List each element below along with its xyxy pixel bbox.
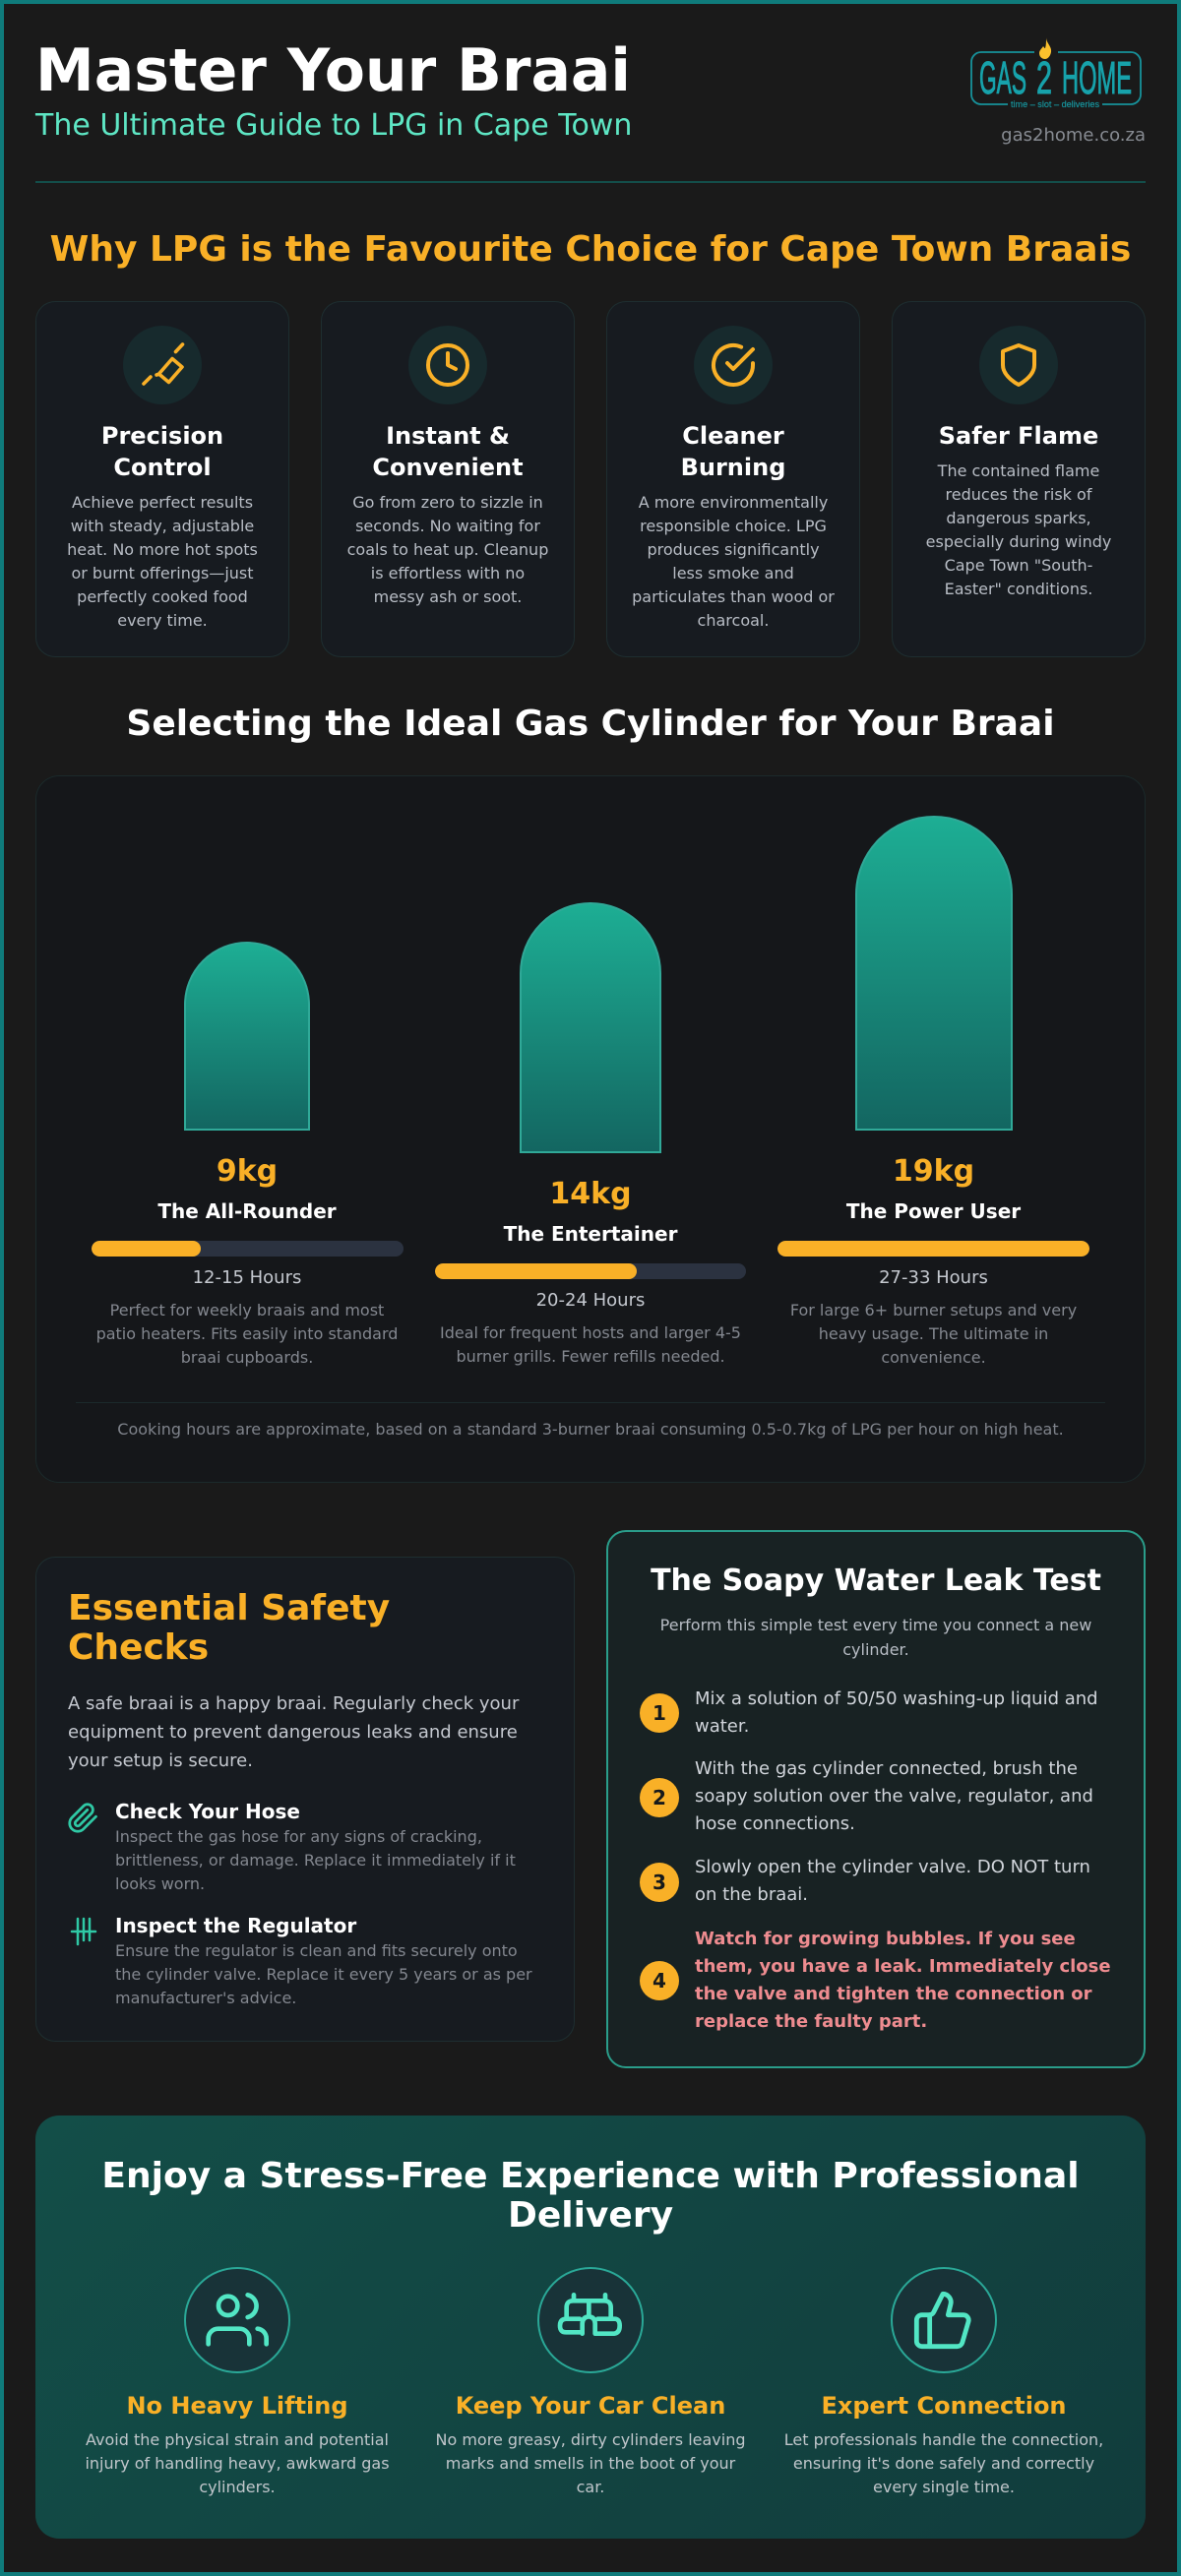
card text: messy ash or soot. bbox=[374, 587, 522, 606]
cylinder: 14kg bbox=[520, 902, 661, 1153]
item text: regulator: the cylinder valve. Replace it every 5 years or as per bbox=[115, 1964, 532, 1984]
card text: produces significantly bbox=[647, 540, 820, 559]
heading: selecting the cylinder: Selecting the Ideal Gas Cylinder for Your Braai bbox=[126, 703, 1055, 744]
step text 3: Slowly open the cylinder valve. DO NOT turn bbox=[695, 1857, 1090, 1877]
card text: A more environmentally bbox=[639, 493, 828, 512]
leak test heading: The Soapy Water Leak Test bbox=[651, 1564, 1101, 1598]
description bbox=[440, 1323, 741, 1366]
cylinder: 9kg bbox=[184, 942, 310, 1131]
description: For large 6+ burner setups and very bbox=[790, 1301, 1077, 1319]
item text: regulator: Ensure the regulator is clean and fits securely onto bbox=[115, 1940, 518, 1960]
safety intro bbox=[68, 1693, 520, 1771]
benefit text bbox=[85, 2430, 390, 2495]
panel: cylinder comparison bbox=[35, 775, 1146, 1483]
card text: or burnt offerings—just bbox=[71, 564, 254, 583]
card heading bbox=[101, 421, 223, 480]
icon: check circle bbox=[694, 326, 773, 404]
description: heavy usage. The ultimate in bbox=[819, 1324, 1048, 1343]
logo: Gas 2 Home: GAS bbox=[979, 52, 1026, 103]
title: Master Your Braai bbox=[35, 35, 631, 104]
panel: instant and convenient bbox=[321, 301, 575, 657]
description: Perfect for weekly braais and most bbox=[110, 1301, 384, 1319]
hours: 12-15 Hours bbox=[193, 1267, 301, 1288]
benefit: keep your car clean bbox=[435, 2267, 746, 2495]
step text 2: With the gas cylinder connected, brush the bbox=[695, 1758, 1078, 1779]
safety heading: Checks bbox=[68, 1627, 209, 1667]
step text 3: on the braai. bbox=[695, 1884, 808, 1905]
description bbox=[790, 1301, 1077, 1367]
card text bbox=[632, 493, 835, 630]
description: convenience. bbox=[881, 1348, 986, 1367]
item text: hose bbox=[115, 1827, 516, 1893]
delivery heading: Enjoy a Stress-Free Experience with Professional bbox=[101, 2155, 1080, 2196]
cylinder column: 14kg bbox=[435, 902, 746, 1366]
card text: Go from zero to sizzle in bbox=[352, 493, 543, 512]
description: burner grills. Fewer refills needed. bbox=[456, 1347, 725, 1366]
description: Ideal for frequent hosts and larger 4-5 bbox=[440, 1323, 741, 1342]
heading: why LPG: Why LPG is the Favourite Choice for Cape Town Braais bbox=[50, 228, 1131, 270]
description bbox=[96, 1301, 398, 1367]
card text: reduces the risk of bbox=[946, 484, 1091, 504]
card text: especially during windy bbox=[926, 531, 1111, 551]
benefit text bbox=[435, 2430, 746, 2495]
step 2 bbox=[640, 1758, 1093, 1834]
card heading: Safer Flame bbox=[939, 421, 1098, 449]
icon: car seats bbox=[537, 2267, 644, 2373]
benefit text: ensuring it's done safely and correctly bbox=[793, 2454, 1094, 2472]
panel: essential safety checks bbox=[35, 1557, 575, 2042]
card heading: Precision bbox=[101, 421, 223, 449]
card text bbox=[926, 460, 1111, 598]
hours: 27-33 Hours bbox=[879, 1267, 988, 1288]
card text: particulates than wood or bbox=[632, 587, 835, 606]
name: The Power User bbox=[846, 1199, 1021, 1223]
card heading: Instant & bbox=[386, 421, 510, 449]
card heading: Cleaner bbox=[682, 421, 784, 449]
card text bbox=[347, 493, 548, 606]
delivery heading bbox=[101, 2155, 1080, 2236]
safety intro: A safe braai is a happy braai. Regularly check your bbox=[68, 1693, 519, 1714]
step number 1: 1 bbox=[653, 1700, 666, 1724]
step text 1 bbox=[695, 1688, 1098, 1736]
step text 4 warning: replace the faulty part. bbox=[695, 2011, 927, 2031]
subtitle: The Ultimate Guide to LPG in Cape Town bbox=[35, 108, 632, 143]
step text 3 bbox=[695, 1857, 1090, 1905]
panel: soapy water leak test bbox=[606, 1530, 1146, 2068]
safety heading bbox=[68, 1588, 390, 1667]
leak test intro: Perform this simple test every time you connect a new bbox=[660, 1616, 1091, 1634]
benefit: expert connection bbox=[784, 2267, 1103, 2495]
step 3 bbox=[640, 1857, 1090, 1905]
description: patio heaters. Fits easily into standard bbox=[96, 1324, 398, 1343]
safety intro: your setup is secure. bbox=[68, 1750, 253, 1771]
step text 2 bbox=[695, 1758, 1093, 1834]
benefit text: car. bbox=[577, 2478, 604, 2495]
card text: seconds. No waiting for bbox=[355, 517, 540, 535]
hours: 20-24 Hours bbox=[536, 1290, 645, 1311]
benefit text: Avoid the physical strain and potential bbox=[86, 2430, 389, 2448]
weight: 19kg: 19kg bbox=[893, 1153, 974, 1189]
cylinder: 19kg bbox=[855, 816, 1013, 1131]
benefit heading: Keep Your Car Clean bbox=[456, 2391, 725, 2419]
icon: gas lighter bbox=[123, 326, 202, 404]
step text 4 warning: them, you have a leak. Immediately close bbox=[695, 1956, 1111, 1976]
step text 2: hose connections. bbox=[695, 1813, 855, 1834]
card text: Easter" conditions. bbox=[945, 579, 1092, 598]
icon: thumbs up bbox=[891, 2267, 997, 2373]
logo: Gas 2 Home: time – slot – deliveries bbox=[1011, 99, 1099, 109]
step number 2 bbox=[640, 1778, 679, 1817]
item text: regulator: manufacturer's advice. bbox=[115, 1988, 296, 2007]
name: The Entertainer bbox=[504, 1222, 677, 1246]
card heading bbox=[372, 421, 524, 480]
step number 1 bbox=[640, 1692, 679, 1732]
cylinder column: 9kg bbox=[92, 942, 404, 1367]
card heading: Convenient bbox=[372, 453, 524, 480]
weight: 14kg: 14kg bbox=[549, 1177, 632, 1211]
item heading: hose: Check Your Hose bbox=[115, 1800, 300, 1823]
card text: every time. bbox=[117, 611, 208, 630]
card text: responsible choice. LPG bbox=[640, 517, 827, 535]
hours bar: 35% bbox=[92, 1241, 404, 1257]
name: The All-Rounder bbox=[157, 1199, 337, 1223]
benefit heading: No Heavy Lifting bbox=[126, 2391, 348, 2419]
icon: people bbox=[184, 2267, 290, 2373]
card text: heat. No more hot spots bbox=[67, 540, 258, 559]
step text 1: Mix a solution of 50/50 washing-up liquid and bbox=[695, 1688, 1098, 1708]
benefit text: injury of handling heavy, awkward gas bbox=[85, 2454, 390, 2472]
step text 1: water. bbox=[695, 1716, 749, 1736]
card text: is effortless with no bbox=[371, 564, 525, 583]
step text 2: soapy solution over the valve, regulator, and bbox=[695, 1786, 1093, 1807]
logo: Gas 2 Home bbox=[970, 37, 1142, 109]
step number 3 bbox=[640, 1863, 679, 1902]
card text: perfectly cooked food bbox=[77, 587, 248, 606]
cylinder column: 19kg bbox=[777, 816, 1089, 1367]
card text: charcoal. bbox=[698, 611, 769, 630]
safety intro: equipment to prevent dangerous leaks and ensure bbox=[68, 1722, 518, 1743]
card text: Cape Town "South- bbox=[945, 555, 1092, 575]
footnote: Cooking hours are approximate, based on a standard 3-burner braai consuming 0.5-0.7kg of LPG per hour on high heat. bbox=[117, 1420, 1064, 1439]
step text 4 warning: the valve and tighten the connection or bbox=[695, 1984, 1092, 2003]
leak test intro: cylinder. bbox=[842, 1639, 909, 1659]
benefit text: cylinders. bbox=[199, 2478, 276, 2495]
card text: less smoke and bbox=[672, 564, 794, 583]
weight: 9kg: 9kg bbox=[217, 1153, 278, 1189]
icon: shield bbox=[979, 326, 1058, 404]
card heading: Burning bbox=[681, 453, 785, 480]
step 4 bbox=[640, 1929, 1111, 2031]
step number 4: 4 bbox=[653, 1969, 666, 1993]
panel: cleaner burning bbox=[606, 301, 860, 657]
step number 4 bbox=[640, 1961, 679, 2000]
benefit text: every single time. bbox=[873, 2478, 1015, 2495]
benefit text: Let professionals handle the connection, bbox=[784, 2430, 1103, 2448]
leak test intro bbox=[660, 1616, 1091, 1659]
step 1 bbox=[640, 1688, 1098, 1736]
item text: hose: brittleness, or damage. Replace it immediately if it bbox=[115, 1851, 516, 1870]
hours bar: 100% bbox=[777, 1241, 1088, 1257]
item text: hose: looks worn. bbox=[115, 1874, 205, 1893]
icon: clock bbox=[408, 326, 487, 404]
card text: The contained flame bbox=[938, 460, 1099, 480]
card text: coals to heat up. Cleanup bbox=[347, 540, 548, 559]
delivery heading: Delivery bbox=[508, 2194, 673, 2236]
item text: regulator bbox=[115, 1940, 532, 2007]
description: braai cupboards. bbox=[181, 1348, 313, 1367]
panel: professional delivery bbox=[35, 2116, 1146, 2539]
hours bar: 65% bbox=[435, 1263, 746, 1279]
card text: Achieve perfect results bbox=[72, 493, 253, 512]
benefit heading: Expert Connection bbox=[821, 2391, 1067, 2419]
card heading bbox=[681, 421, 785, 480]
item text: hose: Inspect the gas hose for any signs of cracking, bbox=[115, 1827, 482, 1846]
website url: gas2home.co.za bbox=[1001, 124, 1146, 146]
card text: with steady, adjustable bbox=[71, 517, 254, 535]
step text 4 warning: Watch for growing bubbles. If you see bbox=[695, 1929, 1076, 1948]
card heading: Control bbox=[113, 453, 212, 480]
item heading: regulator: Inspect the Regulator bbox=[115, 1914, 356, 1937]
safety heading: Essential Safety bbox=[68, 1588, 390, 1627]
card text: dangerous sparks, bbox=[946, 508, 1091, 527]
step text 4 warning bbox=[695, 1929, 1111, 2031]
icon: paperclip hose bbox=[68, 1803, 97, 1833]
panel: precision control bbox=[35, 301, 289, 657]
icon: regulator bbox=[71, 1917, 96, 1946]
step number 3: 3 bbox=[653, 1871, 666, 1894]
benefit text: No more greasy, dirty cylinders leaving bbox=[435, 2430, 746, 2448]
benefit text: marks and smells in the boot of your bbox=[446, 2454, 735, 2472]
benefit text bbox=[784, 2430, 1103, 2495]
benefit: no heavy lifting bbox=[85, 2267, 390, 2495]
step number 2: 2 bbox=[653, 1786, 666, 1809]
panel: safer flame bbox=[892, 301, 1146, 657]
card text bbox=[67, 493, 258, 630]
logo: Gas 2 Home: 2 bbox=[1036, 52, 1052, 103]
